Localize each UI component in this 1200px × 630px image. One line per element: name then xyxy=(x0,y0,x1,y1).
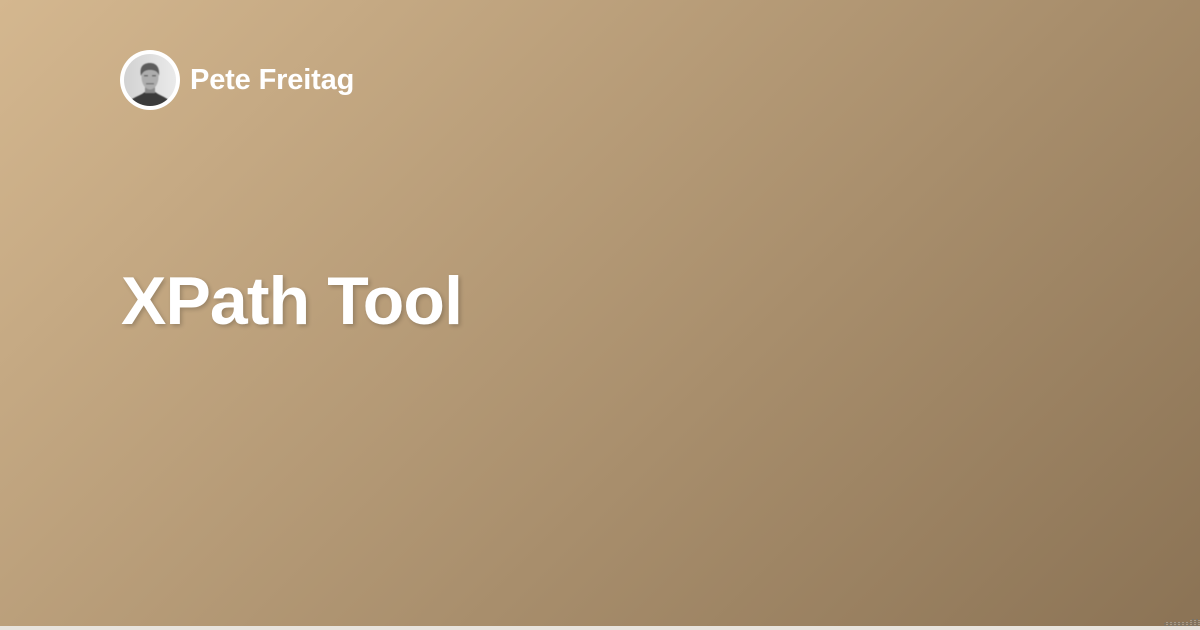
author name: Pete Freitag xyxy=(190,64,354,96)
watermark noise strip xyxy=(1164,619,1200,626)
title: XPath Tool xyxy=(121,263,462,339)
avatar: author portrait xyxy=(120,50,180,110)
